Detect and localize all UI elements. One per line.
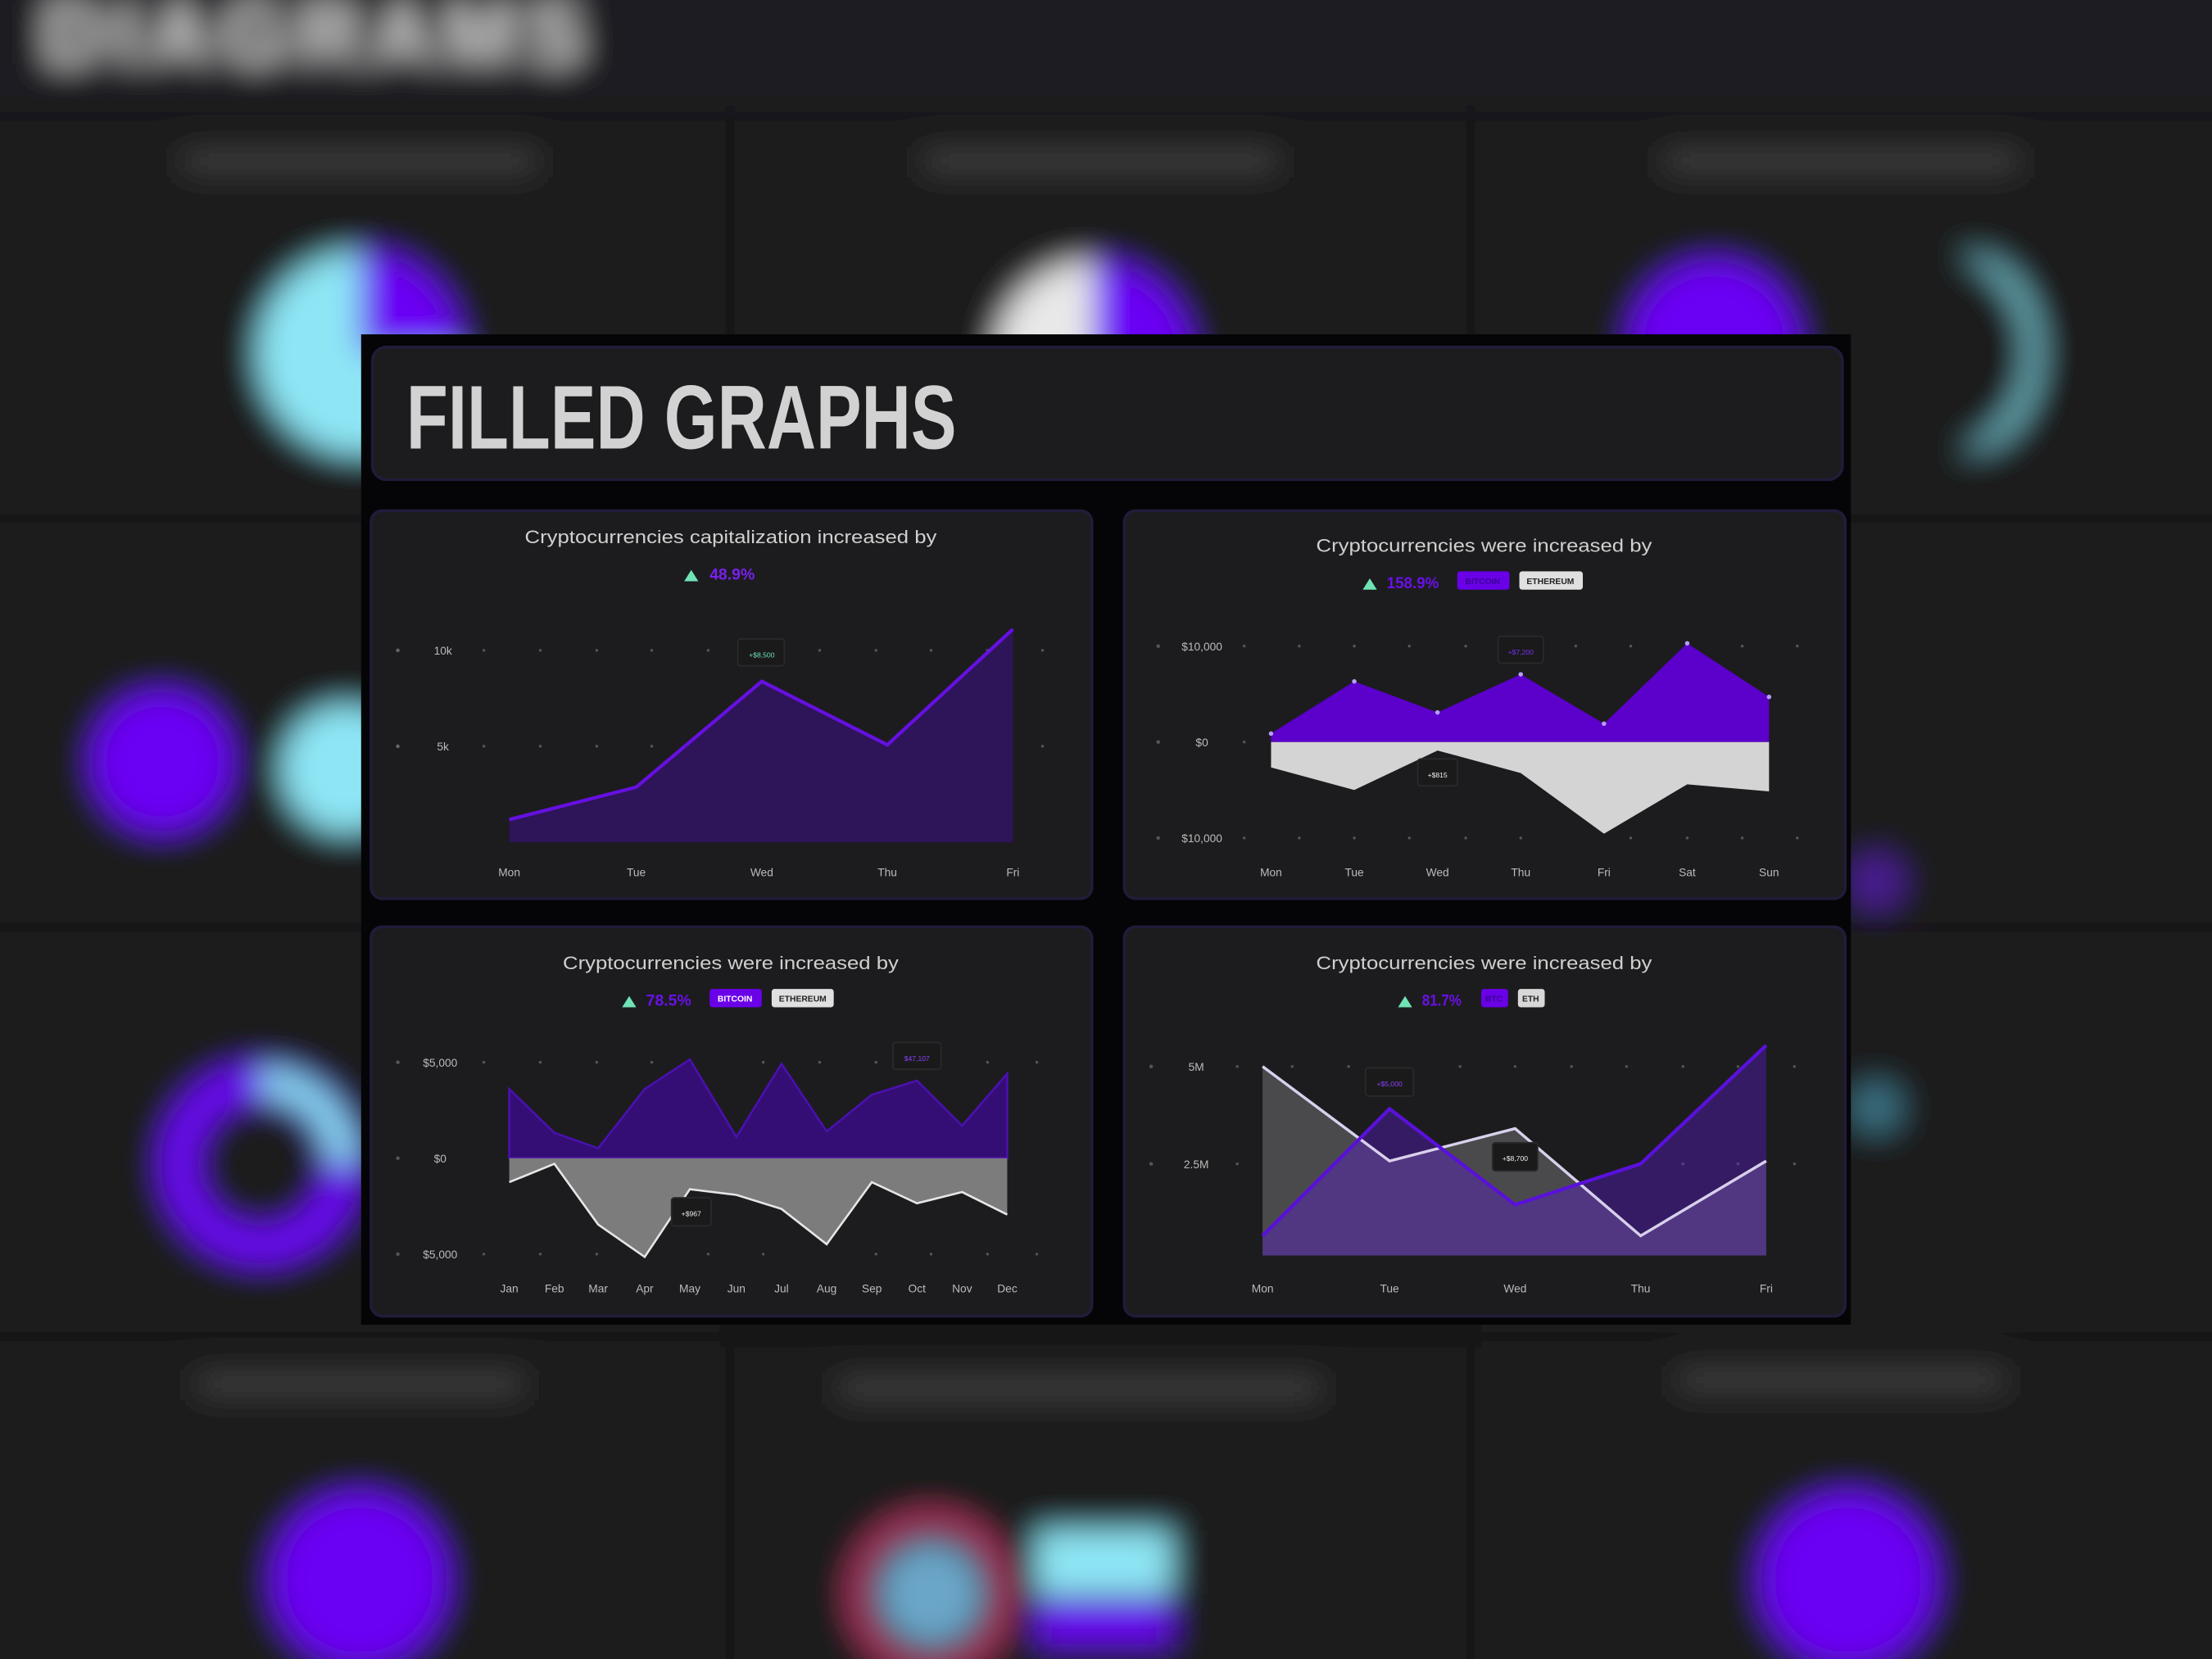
panel: chart 3: Jun: [728, 1282, 746, 1294]
panel: chart 2: [1124, 510, 1845, 899]
panel: chart 1: Wed: [750, 866, 773, 878]
panel: chart 2: $10,000: [1181, 641, 1222, 653]
panel: chart 1: 10k: [434, 645, 452, 657]
panel: chart 3: Feb: [545, 1282, 564, 1294]
panel: chart 3: Aug: [817, 1282, 836, 1294]
panel: chart 2: Tue: [1344, 866, 1364, 878]
panel: chart 4: [1124, 927, 1845, 1317]
panel: chart 2: Thu: [1511, 866, 1530, 878]
panel: chart 3: Jul: [774, 1282, 789, 1294]
panel: chart 2: $0: [1195, 737, 1208, 749]
panel: chart 3: Nov: [952, 1282, 972, 1294]
panel 2 heading: Cryptocurrencies were increased by: [1317, 535, 1652, 555]
area chart 3: [510, 1059, 1007, 1257]
tooltips: +$7,200: [1508, 648, 1534, 656]
panel 2 legend: [1362, 571, 1583, 592]
panel: chart 3: $5,000: [423, 1249, 458, 1261]
panel 1 stat: 48.9%: [709, 567, 755, 584]
tooltips: +$815: [1428, 771, 1448, 779]
area chart 1: [510, 629, 1013, 842]
panel 3 legend: [622, 989, 834, 1010]
panel 4 heading: Cryptocurrencies were increased by: [1317, 953, 1652, 973]
panel: chart 2: Sat: [1679, 866, 1696, 878]
panel 1 stat: [684, 567, 755, 584]
tooltip: [738, 639, 784, 666]
panel: chart 2: $10,000: [1181, 832, 1222, 845]
panel: chart 3: Oct: [909, 1282, 926, 1294]
panel: chart 4: Mon: [1252, 1282, 1274, 1294]
panel: chart 4: 5M: [1189, 1061, 1204, 1073]
panel: chart 3: Dec: [997, 1282, 1018, 1294]
panel 2 legend: 158.9%: [1387, 575, 1439, 592]
panel 3 legend: 78.5%: [646, 993, 691, 1010]
area chart 2: [1269, 641, 1771, 834]
area chart 4: [1262, 1045, 1766, 1256]
panel: chart 3: [371, 927, 1092, 1317]
title bar: [373, 347, 1843, 479]
panel: chart 3: Jan: [501, 1282, 519, 1294]
panel: chart 1: Thu: [877, 866, 897, 878]
tooltips: $47,107: [904, 1054, 930, 1063]
panel 3 heading: Cryptocurrencies were increased by: [563, 953, 900, 973]
panel 3 legend: ETHEREUM: [779, 995, 827, 1004]
panel: chart 2: Mon: [1260, 866, 1282, 878]
panel: chart 4: Fri: [1760, 1282, 1773, 1294]
panel 4 legend: 81.7%: [1422, 993, 1462, 1010]
tooltips: +$8,700: [1503, 1154, 1528, 1163]
panel: chart 1: [371, 510, 1092, 899]
panel: chart 4: Tue: [1380, 1282, 1399, 1294]
tooltip: +$8,500: [749, 650, 775, 659]
panel: chart 4: Thu: [1631, 1282, 1650, 1294]
panel: chart 3: $0: [434, 1153, 446, 1165]
panel: chart 1: Fri: [1006, 866, 1019, 878]
tooltips: +$5,000: [1376, 1080, 1403, 1088]
panel: chart 3: May: [679, 1282, 700, 1294]
panel: chart 3: Sep: [862, 1282, 882, 1294]
panel: chart 1: 5k: [437, 741, 449, 753]
tooltips: +$967: [682, 1209, 701, 1217]
panel: chart 4: 2.5M: [1184, 1158, 1209, 1171]
tooltips: [1418, 637, 1543, 786]
panel 3 legend: BITCOIN: [718, 995, 752, 1004]
panel: chart 1: Tue: [627, 866, 646, 878]
panel 1 heading: Cryptocurrencies capitalization increased by: [525, 527, 937, 547]
panel: chart 3: $5,000: [423, 1057, 458, 1069]
tooltips: [1366, 1068, 1538, 1171]
panel: chart 4: Wed: [1503, 1282, 1526, 1294]
panel: chart 2: Wed: [1426, 866, 1449, 878]
panel: chart 3: Apr: [636, 1282, 654, 1294]
panel 2 legend: BITCOIN: [1466, 578, 1500, 587]
panel 4 legend: BTC: [1485, 995, 1503, 1004]
panel 4 legend: [1398, 989, 1545, 1010]
panel 4 legend: ETH: [1522, 995, 1539, 1004]
title: FILLED GRAPHS: [406, 368, 956, 469]
panel: chart 3: Mar: [588, 1282, 608, 1294]
panel: chart 2: Fri: [1598, 866, 1611, 878]
panel: chart 1: Mon: [498, 866, 520, 878]
tooltips: [672, 1043, 941, 1226]
panel 2 legend: ETHEREUM: [1526, 578, 1574, 587]
panel: chart 2: Sun: [1759, 866, 1779, 878]
main frame: [361, 334, 1851, 1325]
